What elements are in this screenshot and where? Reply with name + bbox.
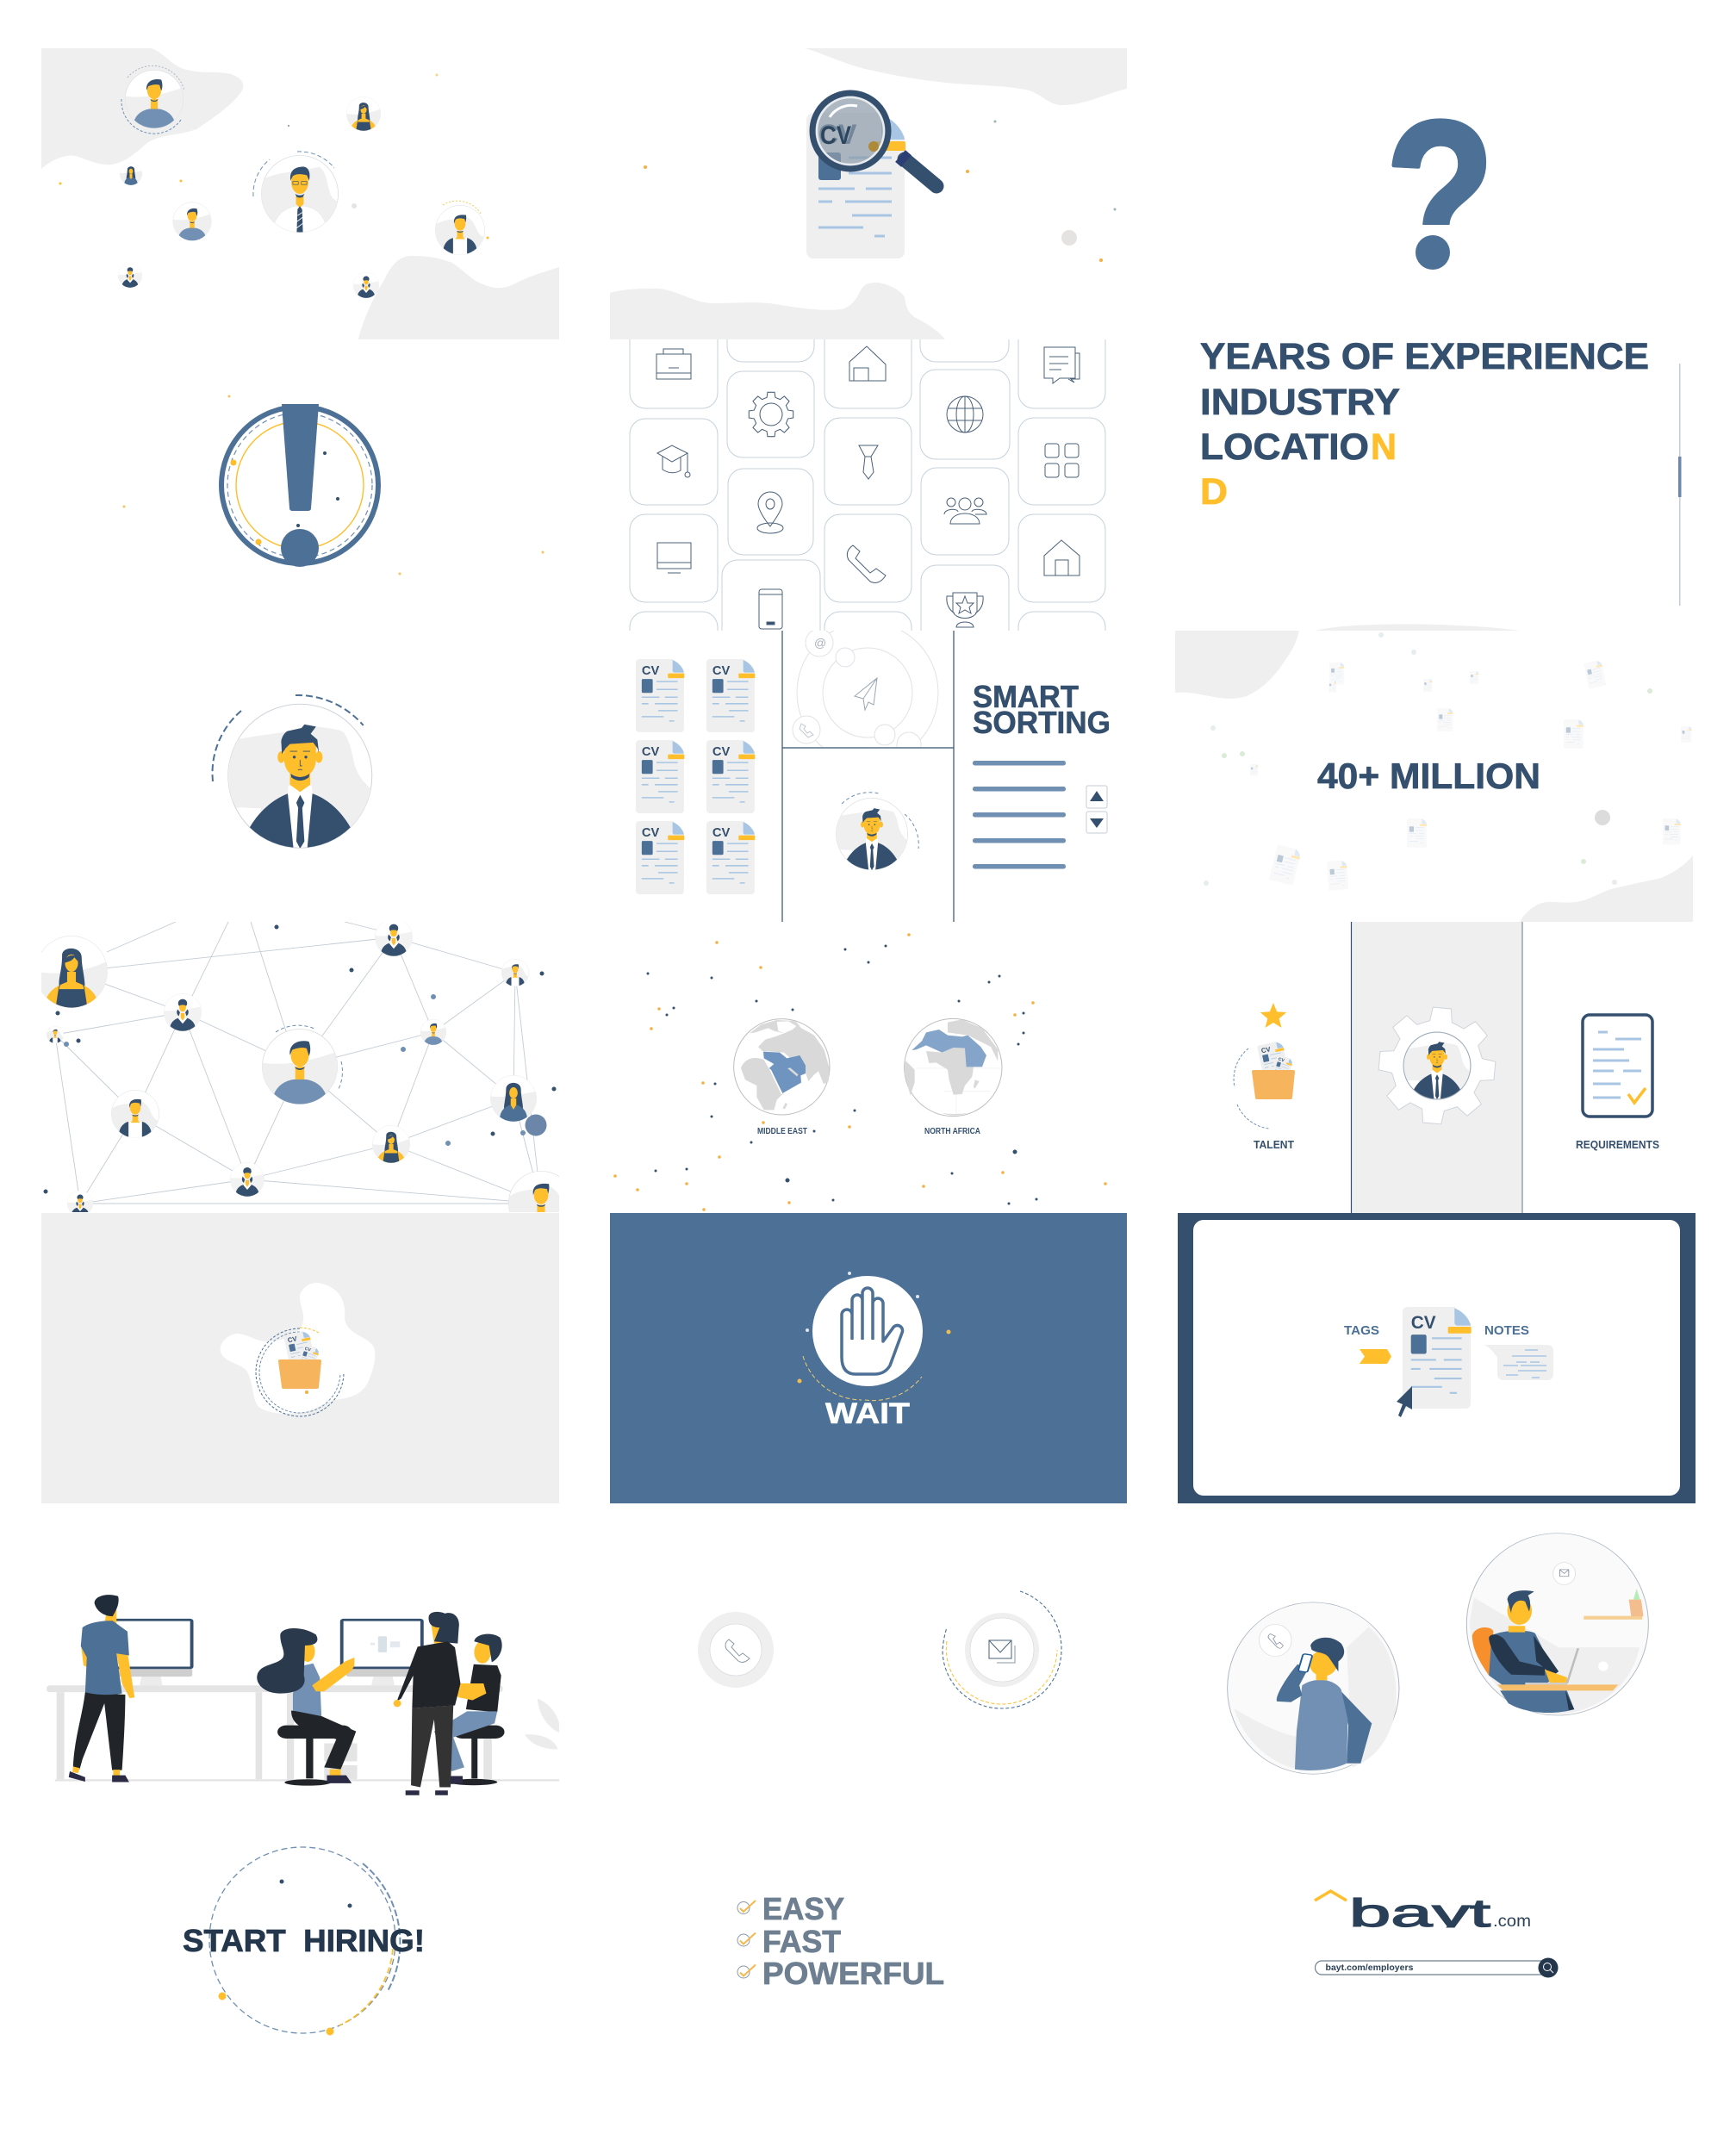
dashed circle (209, 1847, 400, 2033)
panel: folder on gray (41, 1213, 559, 1503)
icon: cursor (1397, 1386, 1412, 1417)
node: man right (501, 959, 529, 986)
avatar: man with glasses and tie (253, 152, 339, 233)
CV grid: CV (712, 745, 730, 759)
text: industry: INDUSTRY (1200, 382, 1400, 423)
particles (800, 1273, 949, 1381)
panel: question and filters (1200, 76, 1682, 606)
icon: globe (947, 396, 983, 432)
icon: logo roof (1315, 1891, 1347, 1901)
node: man jacket (111, 1090, 159, 1138)
text: benefits: FAST (762, 1924, 841, 1959)
node: woman blue (490, 1075, 537, 1122)
logo wordmark: .com (1493, 1913, 1531, 1931)
avatar: man in sweater (121, 65, 184, 134)
text: benefits: EASY (762, 1891, 844, 1926)
blue background (610, 1213, 1127, 1503)
dashed rings (256, 1328, 344, 1416)
blob: top left (1175, 631, 1299, 699)
icon: stop hand (812, 1276, 923, 1386)
panel: contact icons (704, 1591, 1061, 1708)
radar of contact icons (793, 631, 939, 747)
icon: graduation cap (657, 445, 690, 477)
particles (46, 927, 554, 1191)
avatar: man in suit (227, 704, 373, 863)
floating CVs (1250, 660, 1692, 891)
text: location: LOCATIO (1200, 426, 1369, 468)
dashed arc (803, 1356, 922, 1401)
text: benefits (762, 1891, 944, 1991)
text: years of experience: YEARS OF EXPERIENCE (1200, 336, 1649, 377)
CV grid: CV (712, 826, 730, 840)
node: man (420, 1019, 446, 1047)
note bubble (1484, 1345, 1553, 1380)
icon: mail in ring (943, 1591, 1061, 1708)
desks and floor (47, 1685, 563, 1782)
label: requirements: REQUIREMENTS (1576, 1138, 1659, 1151)
icon: house (1044, 540, 1080, 575)
globe: middle east (734, 1019, 830, 1115)
tiles (629, 339, 1106, 631)
frame (1178, 1213, 1696, 1503)
magnifier (812, 93, 936, 186)
document: CV (806, 113, 905, 258)
label: middle east: MIDDLE EAST (757, 1127, 807, 1136)
heading: 40+ million: 40+ MILLION (1317, 756, 1540, 796)
panel: start hiring (183, 1847, 425, 2033)
icon: location pin (757, 492, 783, 533)
node: woman (164, 993, 202, 1033)
panel: 40+ million (1175, 624, 1693, 922)
particles (645, 121, 1115, 260)
person: seated woman (257, 1628, 356, 1786)
dashed arcs (213, 695, 364, 781)
blob: bottom (610, 283, 945, 339)
panel: smart sorting (636, 622, 1111, 922)
icon: gear (749, 392, 793, 437)
avatar: man in jacket (435, 201, 485, 255)
node: bottom right (508, 1171, 559, 1212)
panel: easy fast powerful (737, 1891, 944, 1991)
sort buttons (1086, 786, 1107, 833)
icon: phone in ring (704, 1618, 768, 1682)
monitor left (113, 1620, 192, 1685)
CV grid: CV (712, 664, 730, 678)
document: CV (1403, 1307, 1472, 1409)
radar of contact icons: @ (814, 636, 826, 650)
icon: monitor (657, 543, 691, 573)
panel: CV magnifier (610, 48, 1127, 339)
avatar: small person right (353, 272, 379, 299)
icon: talent folder (1234, 1041, 1295, 1129)
icon: requirements document (1583, 1015, 1652, 1117)
icon: briefcase (656, 349, 691, 379)
particles (615, 935, 1105, 1210)
panel: talent and requirements (1234, 922, 1659, 1213)
document: CV: CV (818, 119, 857, 150)
connection lines (55, 922, 541, 1204)
icon: exclamation mark (281, 404, 319, 567)
label: talent: TALENT (1254, 1138, 1294, 1151)
icon: question mark: ? (1385, 76, 1495, 315)
heading: smart sorting: SORTING (973, 705, 1111, 740)
node: woman yellow (372, 1125, 410, 1163)
text: location: N (1371, 426, 1397, 468)
gray background (41, 1213, 559, 1503)
node: woman top (375, 922, 413, 956)
scrollbar (1678, 364, 1682, 606)
document: CV: CV (1411, 1313, 1436, 1333)
avatar: man in suit (836, 793, 918, 877)
label: tags: TAGS (1344, 1323, 1379, 1338)
person: standing woman (394, 1612, 460, 1795)
blob: top (805, 48, 1127, 105)
avatar: small woman bottom (118, 264, 142, 289)
sorted list bars (973, 761, 1066, 868)
heading: smart sorting (973, 679, 1111, 740)
icon: grid (1045, 444, 1079, 477)
white blob (221, 1283, 375, 1414)
node: tiny man (47, 1026, 64, 1043)
panel: tags and notes (1178, 1213, 1696, 1503)
heading: wait: WAIT (825, 1397, 910, 1430)
CV grid (636, 659, 755, 894)
icon: phone handset (847, 545, 886, 582)
CV grid: CV (642, 664, 659, 678)
panel: man portrait (213, 695, 373, 863)
globe: north africa (905, 1018, 1002, 1117)
avatar: man in blue sweater (172, 202, 212, 244)
panel: icon grid (629, 339, 1106, 631)
magnifier: CV (820, 121, 851, 150)
heading: smart sorting: SMART (973, 679, 1079, 714)
particles (1206, 635, 1650, 883)
label: notes: NOTES (1484, 1323, 1529, 1338)
icon: question mark (1391, 118, 1487, 270)
search bar: bayt.com/employers (1325, 1963, 1414, 1973)
icon: gear with man (1374, 1003, 1500, 1129)
blob: bottom right (1520, 855, 1693, 922)
CV grid: CV (642, 826, 659, 840)
particles (222, 1882, 350, 2031)
node: woman large (35, 936, 108, 1008)
avatar: small woman (120, 163, 142, 185)
person: standing man (69, 1595, 134, 1782)
label: north africa: NORTH AFRICA (924, 1127, 980, 1136)
icon: house (849, 346, 886, 381)
panel: call or email (1228, 1534, 1648, 1774)
man on the phone (1228, 1602, 1399, 1774)
text: typing letter: D (1200, 471, 1228, 513)
particles (124, 396, 543, 574)
search bar (1315, 1957, 1558, 1978)
text: benefits: POWERFUL (762, 1956, 944, 1991)
monitor right (342, 1620, 423, 1685)
icon: necktie (859, 445, 878, 479)
node: center man (262, 1025, 342, 1110)
blob: bottom right (358, 256, 559, 339)
checklist marks (737, 1901, 756, 1978)
logo wordmark (1349, 1891, 1531, 1935)
avatar: woman (346, 96, 381, 131)
icon: yellow tag (1360, 1349, 1391, 1364)
particles (60, 75, 488, 238)
man at laptop (1466, 1534, 1648, 1715)
panel: team at desks (47, 1595, 563, 1795)
panel: bayt logo (1315, 1891, 1558, 1978)
logo wordmark: bayt (1349, 1891, 1491, 1935)
panel: regions (615, 935, 1105, 1210)
node: person (230, 1162, 264, 1198)
icon: folder with CVs (278, 1330, 321, 1389)
CV grid: CV (642, 745, 659, 759)
icon: chat bubble (1044, 347, 1080, 383)
person: seated man (434, 1634, 505, 1785)
ring (221, 407, 378, 563)
icon: star (1260, 1003, 1286, 1028)
node: large dot (526, 1115, 546, 1135)
panel: exclamation (124, 396, 543, 574)
node: bottom left (67, 1191, 93, 1212)
inner card (1193, 1220, 1680, 1496)
panel: wait (610, 1213, 1127, 1503)
icon: mobile phone (759, 589, 782, 629)
panel: candidates scattered (41, 48, 559, 339)
divider lines (782, 631, 954, 922)
particle (305, 1391, 308, 1394)
blob: top strip (1316, 624, 1520, 631)
blob: top left (41, 48, 243, 169)
icon: trophy (947, 593, 983, 627)
gray column (1351, 922, 1522, 1213)
panel: candidate network (41, 922, 559, 1212)
icon: team (944, 498, 986, 524)
heading: start hiring: START HIRING! (183, 1923, 425, 1958)
